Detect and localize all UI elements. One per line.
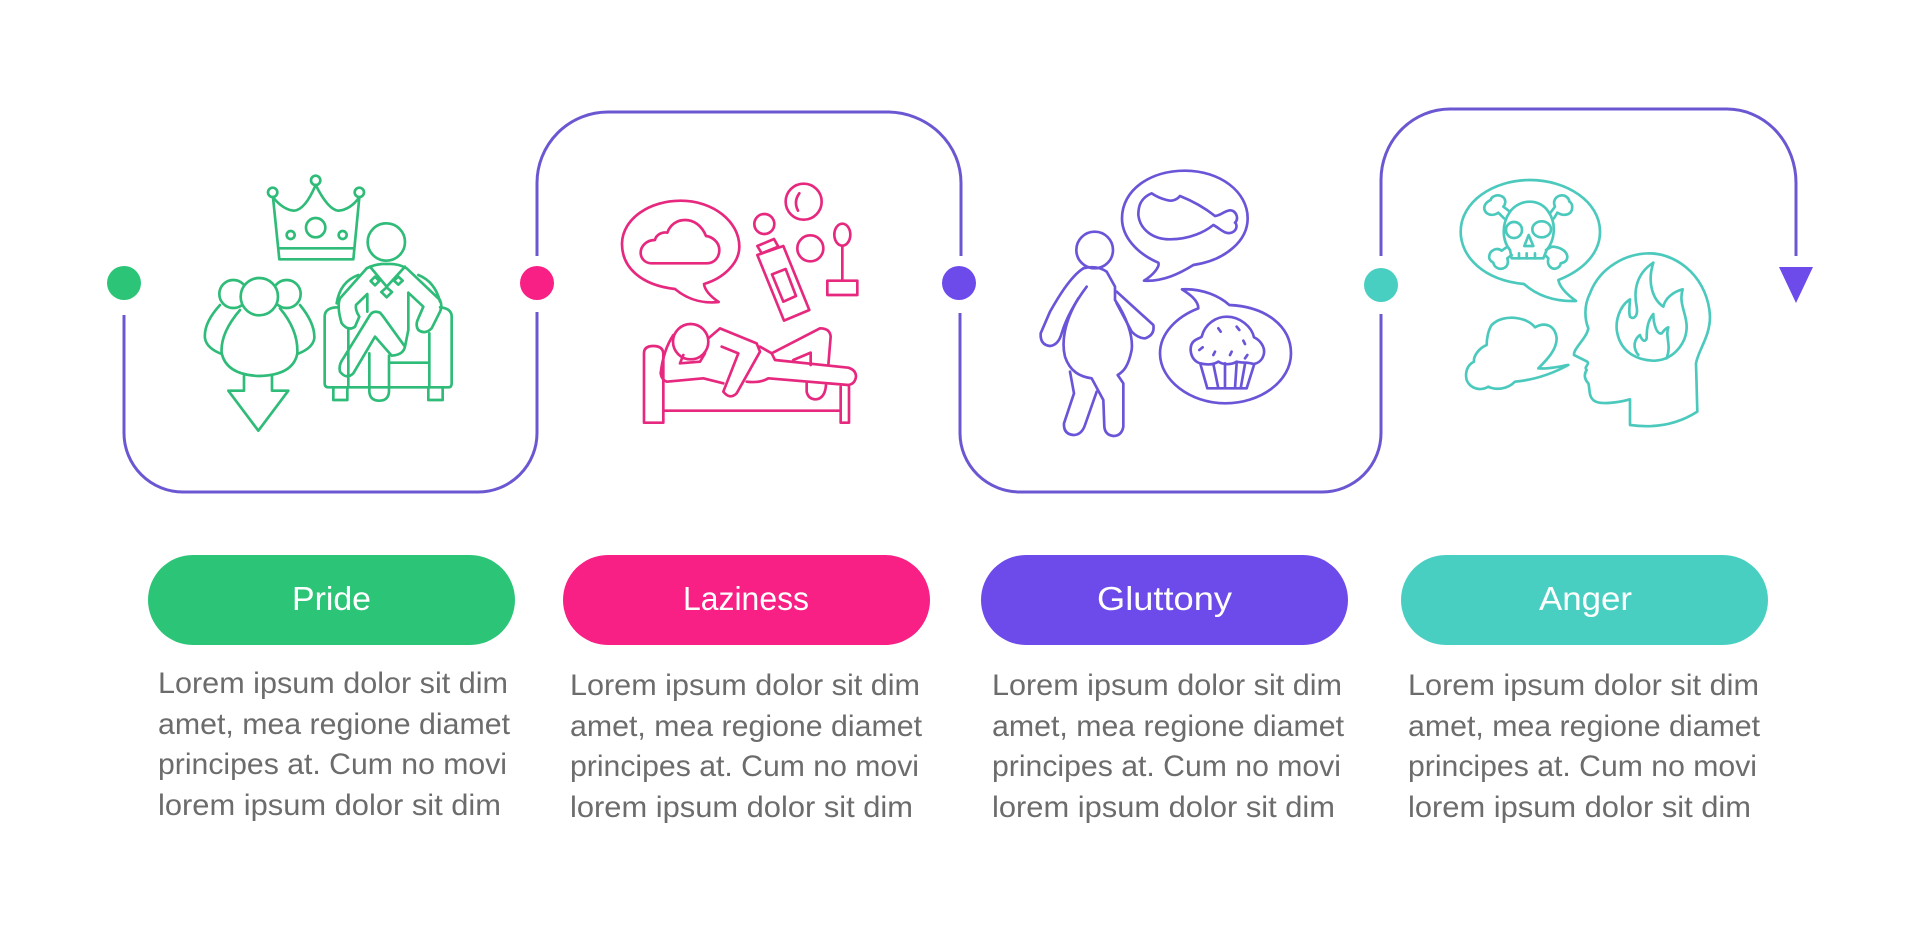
panel: gluttony: [942, 171, 1348, 824]
label pill: gluttony: Gluttony: [1097, 580, 1233, 617]
text block: anger: principes at. Cum no movi: [1408, 750, 1757, 783]
text block: gluttony: principes at. Cum no movi: [992, 750, 1341, 783]
label pill: laziness: [563, 555, 930, 645]
label pill: pride: [148, 555, 515, 645]
text block: gluttony: [992, 669, 1345, 824]
icon: man lying on bed with bubble and cosmetics: [622, 184, 857, 423]
text block: anger: [1408, 669, 1761, 824]
connector line with arrow: [124, 109, 1813, 492]
text block: pride: lorem ipsum dolor sit dim: [158, 789, 501, 822]
text block: anger: lorem ipsum dolor sit dim: [1408, 791, 1751, 824]
step dot: anger: [1364, 268, 1398, 302]
label pill: anger: [1401, 555, 1768, 645]
label pill: anger: Anger: [1539, 580, 1632, 617]
label pill: pride: Pride: [292, 580, 371, 617]
text block: laziness: principes at. Cum no movi: [570, 750, 919, 783]
text block: gluttony: Lorem ipsum dolor sit dim: [992, 669, 1342, 702]
text block: pride: [158, 667, 511, 822]
icon: head on fire, skull bubble and cloud: [1461, 180, 1710, 426]
step dot: pride: [107, 266, 141, 300]
text block: laziness: amet, mea regione diamet: [570, 710, 923, 743]
text block: laziness: [570, 669, 923, 824]
label pill: laziness: Laziness: [683, 580, 809, 617]
text block: gluttony: lorem ipsum dolor sit dim: [992, 791, 1335, 824]
text block: anger: Lorem ipsum dolor sit dim: [1408, 669, 1759, 702]
text block: laziness: lorem ipsum dolor sit dim: [570, 791, 913, 824]
text block: anger: amet, mea regione diamet: [1408, 710, 1761, 743]
text block: pride: principes at. Cum no movi: [158, 748, 507, 781]
arrow head: [1779, 267, 1813, 303]
panel: pride: [107, 176, 515, 822]
panel: laziness: [520, 184, 930, 824]
icon: crown, pride figure and seated man: [205, 176, 452, 431]
step dot: gluttony: [942, 266, 976, 300]
panel: anger: [1364, 180, 1768, 824]
icon: overweight figure with food bubbles: [1041, 171, 1291, 436]
text block: gluttony: amet, mea regione diamet: [992, 710, 1345, 743]
label pill: gluttony: [981, 555, 1348, 645]
text block: pride: Lorem ipsum dolor sit dim: [158, 667, 508, 700]
step dot: laziness: [520, 266, 554, 300]
text block: laziness: Lorem ipsum dolor sit dim: [570, 669, 920, 702]
text block: pride: amet, mea regione diamet: [158, 708, 511, 741]
